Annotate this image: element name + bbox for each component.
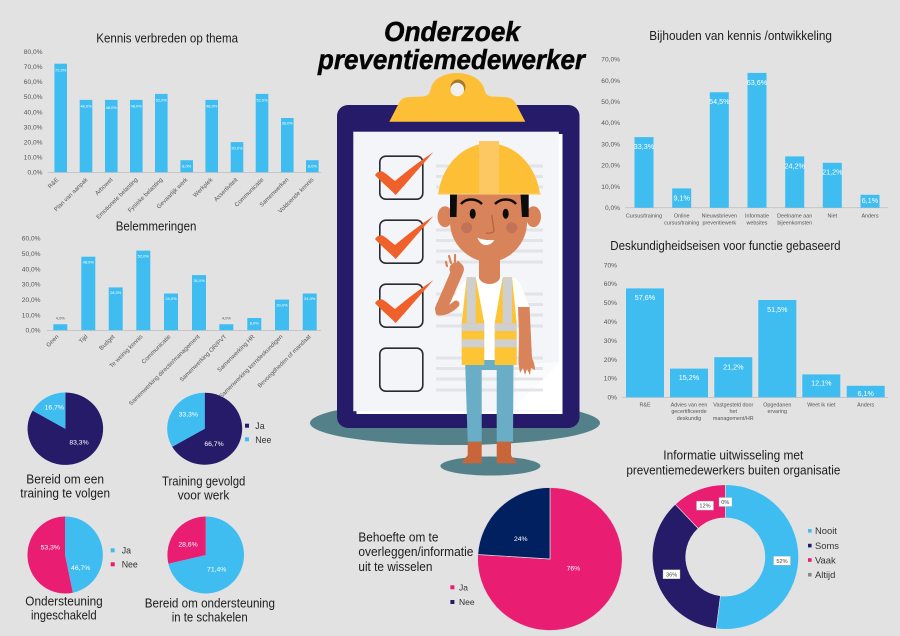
category labels: preventiewerk <box>703 220 736 226</box>
category labels <box>46 334 313 407</box>
panel: kennis verbreden op thema <box>24 30 321 221</box>
left arm and hand <box>439 255 463 312</box>
category labels: R&E <box>639 402 651 408</box>
pie chart <box>167 516 244 593</box>
y axis labels: 30% <box>604 338 617 345</box>
bar chart: 48,0% <box>131 104 142 108</box>
y axis labels: 10,0% <box>601 184 620 191</box>
bar chart: 4,0% <box>56 316 65 320</box>
category labels: het <box>730 409 738 415</box>
pie chart: 53,3% <box>41 544 60 551</box>
jeans <box>465 357 514 442</box>
bar chart: 6,1% <box>862 196 879 205</box>
legend: Ja <box>255 421 265 431</box>
pie chart: 16,7% <box>45 405 64 412</box>
pie chart: 46,7% <box>71 565 90 572</box>
category labels: Bevoegdheden of mandaat <box>257 334 313 389</box>
category labels <box>47 176 315 221</box>
caption <box>20 472 110 500</box>
category labels: gecertificeerde <box>671 409 707 415</box>
bar chart: 24,0% <box>165 296 177 301</box>
worker <box>438 141 541 463</box>
heading: Bijhouden van kennis /ontwikkeling <box>649 28 832 43</box>
y axis labels: 50,0% <box>601 99 620 106</box>
category labels: Advies van een <box>671 402 707 408</box>
category labels: Gevaarlijk werk <box>156 176 190 210</box>
bar chart <box>48 64 321 173</box>
shirt <box>450 277 530 360</box>
pie chart: 76% <box>567 565 580 572</box>
data labels: 52% <box>776 559 788 565</box>
right arm <box>518 306 535 375</box>
caption <box>358 530 473 574</box>
bar chart: 28,0% <box>110 290 122 295</box>
eyes <box>470 209 509 219</box>
pie chart: 28,6% <box>178 542 198 549</box>
caption: uit te wisselen <box>358 559 432 574</box>
hard hat <box>438 141 540 195</box>
nose <box>486 215 494 233</box>
heading: Informatie uitwisseling met <box>663 448 804 462</box>
donut chart <box>652 485 799 629</box>
category labels: Opgedanen <box>763 402 791 408</box>
caption: overleggen/informatie <box>358 544 473 559</box>
heading <box>626 448 840 478</box>
y axis labels: 10,0% <box>24 154 43 162</box>
y axis labels: 20% <box>604 357 617 364</box>
category labels: Assertiviteit <box>213 177 240 203</box>
y axis labels: 40,0% <box>601 120 620 127</box>
y axis labels: 60,0% <box>601 78 620 85</box>
category labels: Tijd <box>78 334 89 345</box>
caption: training te volgen <box>20 486 110 500</box>
category labels: Geen <box>46 334 60 349</box>
y axis labels: 10,0% <box>22 312 41 319</box>
category labels: Online <box>674 213 689 219</box>
bar chart: 63,6% <box>747 78 768 87</box>
caption <box>145 596 275 625</box>
category labels: Werkplek <box>193 176 215 199</box>
category labels: management/HR <box>713 416 754 422</box>
cheeks <box>461 222 517 233</box>
ground shadow <box>310 401 600 445</box>
bar chart: 52,0% <box>156 98 167 102</box>
bar chart: 6,1% <box>858 389 874 398</box>
category labels: Samenwerking OR/PVT <box>179 334 229 383</box>
bar chart: 8,0% <box>308 164 317 168</box>
pie chart <box>478 487 622 630</box>
category labels: Voldoende kennis <box>278 177 315 215</box>
y axis labels: 50% <box>604 300 617 307</box>
y axis labels: 30,0% <box>601 141 620 148</box>
caption: in te schakelen <box>172 610 248 625</box>
illustration: clipboard and worker <box>310 73 600 476</box>
y axis labels: 70,0% <box>24 64 43 71</box>
caption <box>162 473 245 502</box>
heading: Belemmeringen <box>116 218 196 234</box>
caption <box>25 594 103 623</box>
neck <box>479 255 500 284</box>
bar chart: 72,0% <box>55 68 67 72</box>
title: preventiemedewerker <box>317 44 587 75</box>
pie chart: 66,7% <box>204 441 224 448</box>
category labels: Communicatie <box>234 177 266 209</box>
bar chart: 33,3% <box>634 142 655 151</box>
pie: ondersteuning ingeschakeld <box>25 516 138 623</box>
bar chart: 8,0% <box>250 320 259 326</box>
category labels: bijeenkomsten <box>777 220 812 226</box>
category labels: Communicatie <box>141 334 173 366</box>
clipboard clip <box>389 73 525 122</box>
heading: preventiemedewerkers buiten organisatie <box>626 462 840 478</box>
y axis labels <box>604 262 617 402</box>
bar chart: 8,0% <box>182 164 192 168</box>
category labels: deskundig <box>677 416 701 422</box>
y axis labels: 40% <box>604 319 617 326</box>
caption: Bereid om ondersteuning <box>145 596 275 611</box>
category labels: Samenwerking directie/management <box>128 334 202 407</box>
caption: Ondersteuning <box>25 594 103 609</box>
legend: Nee <box>255 435 272 445</box>
checkbox 1 with check mark <box>375 152 433 199</box>
bar chart: 21,2% <box>723 362 744 372</box>
panel: deskundigheidseisen <box>604 238 888 422</box>
bar chart: 15,2% <box>679 373 700 382</box>
category labels: Deelname aan <box>777 213 812 219</box>
y axis labels: 10% <box>604 376 617 383</box>
legend: Soms <box>815 540 839 551</box>
y axis labels: 0,0% <box>25 328 41 335</box>
heading: Deskundigheidseisen voor functie gebaseerd <box>610 238 841 253</box>
bar chart: 36,0% <box>193 278 205 283</box>
legend: Vaak <box>815 554 836 565</box>
y axis labels: 60,0% <box>24 79 43 86</box>
bar chart: 54,5% <box>709 97 730 106</box>
legend <box>111 546 138 570</box>
data labels: 0% <box>721 500 729 506</box>
pie chart: 71,4% <box>207 566 226 573</box>
bar chart: 21,2% <box>822 168 843 177</box>
y axis labels: 20,0% <box>601 163 620 170</box>
caption: Bereid om een <box>26 472 104 486</box>
pie: training gevolgd voor werk <box>162 393 272 502</box>
bar chart: 24,0% <box>304 296 316 301</box>
category labels: websites <box>746 220 768 226</box>
bar chart <box>47 251 321 331</box>
y axis labels: 0% <box>607 395 617 402</box>
category labels: R&E <box>47 177 60 190</box>
category labels: Informatie <box>745 213 769 219</box>
eyebrows <box>461 200 516 204</box>
pie chart <box>167 393 242 465</box>
pie chart <box>27 516 103 593</box>
panel: belemmeringen <box>22 218 321 407</box>
smile <box>477 238 494 245</box>
category labels: Arbowet <box>95 177 115 197</box>
y axis labels: 40,0% <box>24 109 43 116</box>
y axis labels: 70% <box>604 262 617 269</box>
category labels: Emotionele belasting <box>96 177 139 221</box>
bar chart: 12,1% <box>811 378 832 388</box>
face <box>450 193 527 262</box>
bar chart: 36,0% <box>282 120 293 126</box>
bar chart: 51,5% <box>767 305 788 314</box>
bar chart: 48,0% <box>80 104 92 108</box>
hair <box>450 194 529 217</box>
y axis labels <box>601 57 620 212</box>
legend: Nee <box>122 560 138 570</box>
checkbox 3 with check mark <box>375 280 433 327</box>
category labels: Anders <box>861 213 879 219</box>
category labels: Fysieke belasting <box>127 177 164 214</box>
y axis labels: 60% <box>604 281 617 288</box>
legend: Nooit <box>815 525 837 536</box>
bar chart: 48,0% <box>83 260 94 264</box>
pie chart: 83,3% <box>69 440 89 447</box>
caption: Behoefte om te <box>358 530 438 544</box>
y axis labels: 20,0% <box>24 139 43 146</box>
bar chart: 57,6% <box>635 293 656 302</box>
category labels: ervaring <box>768 409 787 415</box>
ears <box>438 206 541 227</box>
pie chart: 24% <box>514 536 528 543</box>
category labels: Plan van aanpak <box>54 176 90 213</box>
checkbox 4 empty <box>380 348 423 391</box>
panel: bijhouden van kennis <box>601 28 888 226</box>
category labels: Vastgesteld door <box>713 402 754 408</box>
bar chart: 20,0% <box>231 146 243 150</box>
category labels: Budget <box>99 334 117 352</box>
caption: Training gevolgd <box>162 473 245 488</box>
heading: Kennis verbreden op thema <box>96 30 239 46</box>
data labels: 12% <box>699 504 711 510</box>
legend: Ja <box>122 546 131 556</box>
caption: ingeschakeld <box>31 608 97 623</box>
category labels <box>639 402 875 422</box>
bar chart: 4,0% <box>222 316 231 320</box>
bar chart: 48,0% <box>106 105 117 110</box>
panel: informatie uitwisseling <box>626 448 840 629</box>
pie: bereid om een training te volgen <box>20 392 110 500</box>
paper text lines <box>436 164 543 392</box>
y axis labels: 80,0% <box>24 49 43 56</box>
category labels: Samenwerken <box>259 177 290 209</box>
bar chart: 24,2% <box>785 161 805 170</box>
legend <box>245 421 272 445</box>
category labels: Nieuwsbrieven <box>702 213 737 219</box>
legend <box>808 525 839 580</box>
bar chart <box>625 73 888 208</box>
y axis labels: 50,0% <box>24 94 43 101</box>
checkbox 2 with check mark <box>375 216 433 263</box>
boots <box>462 442 517 463</box>
legend: Ja <box>459 582 468 592</box>
category labels: Niet <box>828 213 838 219</box>
y axis labels: 30,0% <box>22 282 41 289</box>
title: Onderzoek <box>384 16 521 47</box>
bar chart: 48,0% <box>206 104 218 108</box>
category labels: Te weinig kennis <box>109 334 144 370</box>
paper sheet <box>353 132 562 414</box>
data labels <box>663 498 790 579</box>
y axis labels: 40,0% <box>22 266 41 273</box>
legend: Nee <box>459 597 475 607</box>
pie chart: 33,3% <box>179 411 198 418</box>
clipboard board <box>337 105 580 428</box>
bar chart <box>622 288 888 398</box>
title <box>317 16 587 75</box>
y axis labels: 0,0% <box>605 205 620 212</box>
category labels: Anders <box>857 402 875 408</box>
y axis labels: 0,0% <box>27 170 43 177</box>
y axis labels: 50,0% <box>22 251 41 258</box>
bar chart: 9,1% <box>674 193 690 202</box>
legend: Altijd <box>815 569 835 580</box>
foot shadow <box>440 456 540 476</box>
caption: voor werk <box>178 487 230 502</box>
bar chart: 52,0% <box>256 98 268 102</box>
data labels: 36% <box>666 572 677 578</box>
bar chart: 20,0% <box>276 302 288 308</box>
y axis labels: 60,0% <box>22 236 41 243</box>
y axis labels: 20,0% <box>22 297 41 304</box>
safety vest <box>462 277 517 365</box>
y axis labels: 70,0% <box>601 57 620 64</box>
category labels: Cursus/training <box>626 213 662 219</box>
pie chart <box>28 392 103 465</box>
y axis labels <box>22 236 41 335</box>
pie: bereid om ondersteuning in te schakelen <box>145 516 275 625</box>
panel: behoefte om te overleggen <box>358 487 622 630</box>
y axis labels <box>24 49 43 177</box>
category labels: Weet ik niet <box>807 402 836 408</box>
category labels: Samenwerking kerndeskundigen <box>219 334 284 400</box>
category labels: Samenwerking HR <box>217 334 257 374</box>
category labels: cursus/training <box>664 220 699 226</box>
bar chart: 52,0% <box>138 254 149 258</box>
category labels <box>626 213 879 226</box>
legend <box>450 582 475 607</box>
y axis labels: 30,0% <box>24 124 43 131</box>
